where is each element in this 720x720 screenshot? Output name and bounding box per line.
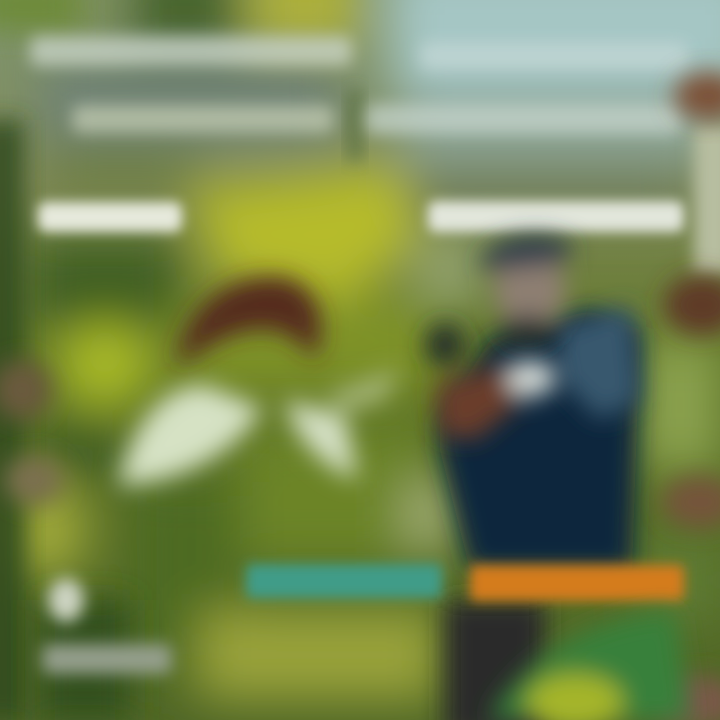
bottom right leaf [488,612,690,720]
panel: title text block [30,36,688,134]
illustration: brown bird [176,277,321,365]
seed pod 4 [655,676,720,720]
teal label bar [246,564,442,598]
bottom left caption [42,578,172,674]
man: legs [445,600,545,720]
illustration: man in navy jacket [425,236,640,720]
subheading left [38,202,182,232]
heading line 1 [30,36,688,70]
left seed pods [0,360,52,420]
seed pod 1 [674,72,720,120]
seed pod 2 [664,275,720,335]
man: arms and hands [425,323,556,440]
orange label bar [470,565,684,601]
dark left edge [0,120,24,720]
heading line 2 [72,104,682,134]
seed pod 3 [662,476,720,528]
man: head and cap [478,236,574,348]
illustration: white wings [118,368,400,485]
subheading right [428,201,684,232]
